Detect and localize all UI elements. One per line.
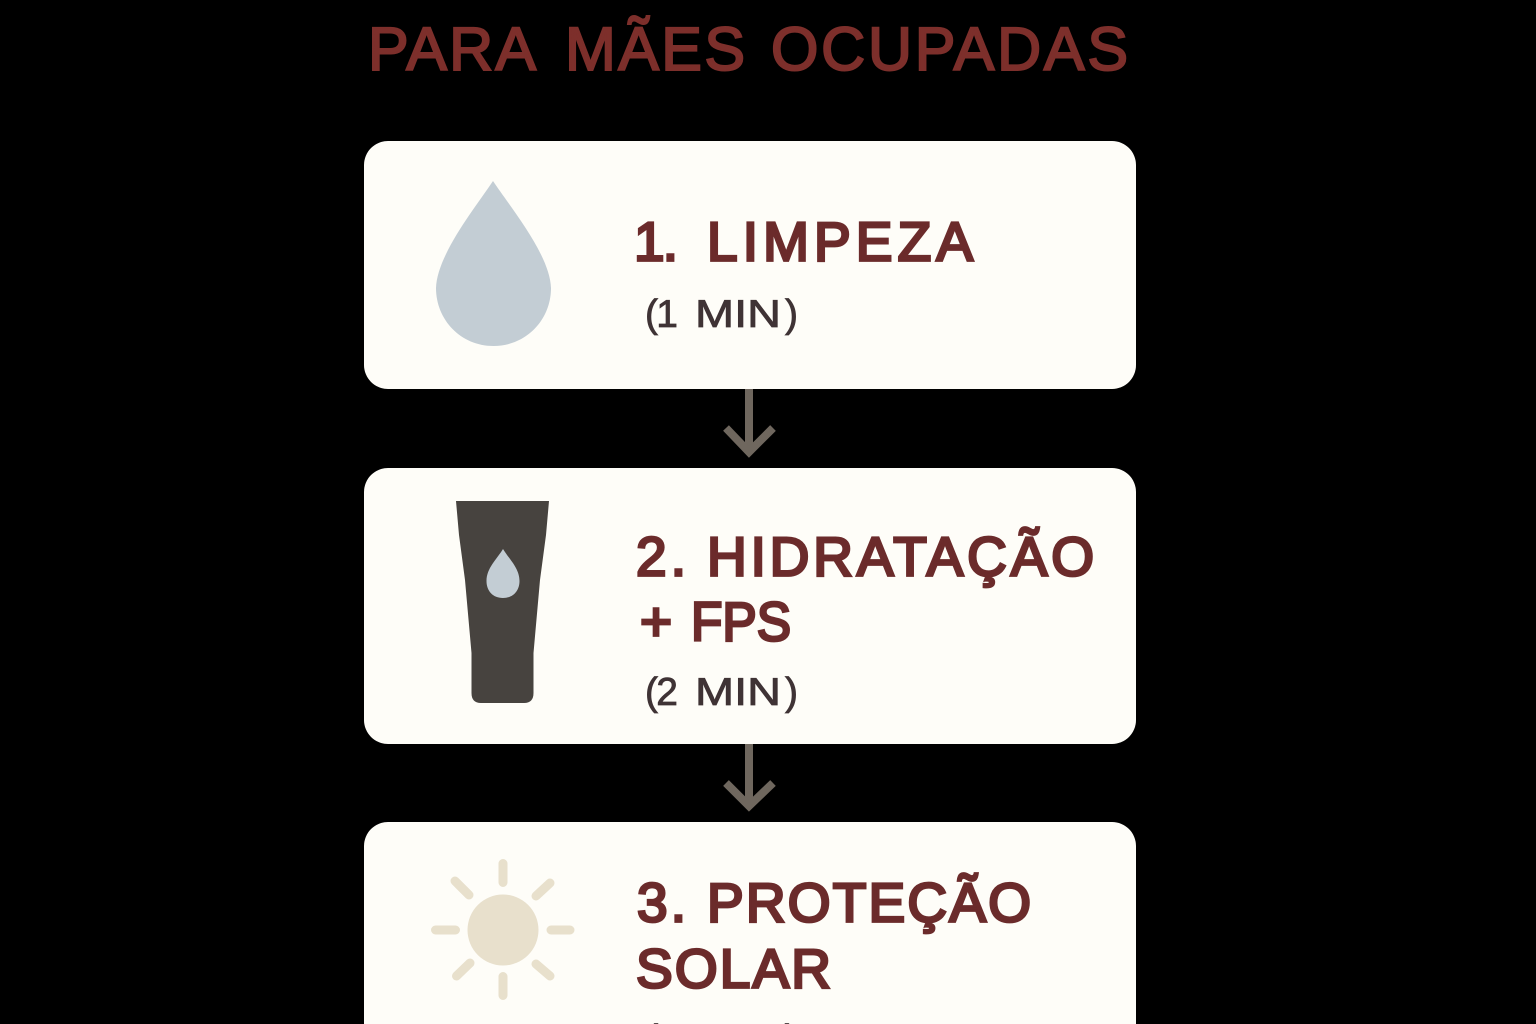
heading: step 1: LIMPEZA [707, 211, 973, 273]
heading: step 2 [636, 526, 1094, 653]
title: MÃES [565, 15, 745, 83]
text: step 1 duration: ) [785, 293, 798, 336]
text: step 2 duration: ) [785, 671, 798, 714]
heading: step 2: FPS [691, 591, 791, 653]
heading: step 2: 2. [636, 526, 686, 588]
text: step 1 duration [645, 293, 798, 336]
title: PARA [368, 15, 536, 83]
heading: step 1: 1. [634, 211, 678, 273]
heading: step 3 [636, 872, 1031, 1000]
heading: step 2: HIDRATAÇÃO [707, 526, 1094, 588]
icon: sun [436, 864, 570, 996]
title [368, 15, 1128, 83]
arrow: step 1 to step 2 [726, 389, 773, 452]
text: step 2 duration [645, 671, 798, 714]
panel: step 1 limpeza [364, 141, 1136, 389]
heading: step 3: 3. [637, 872, 686, 934]
arrow: step 2 to step 3 [726, 744, 773, 806]
text: step 2 duration: (2 [645, 671, 678, 714]
icon: water drop [436, 181, 551, 346]
panel: step 2 hidratacao [364, 468, 1136, 744]
text: step 3 duration [645, 1018, 798, 1024]
text: step 1 duration: (1 [645, 293, 678, 336]
text: step 1 duration: MIN [695, 293, 781, 336]
heading: step 2: + [640, 591, 672, 653]
heading: step 3: PROTEÇÃO [707, 872, 1031, 934]
title: OCUPADAS [771, 15, 1128, 83]
heading: step 3: SOLAR [636, 938, 831, 1000]
icon: tube with drop [456, 501, 549, 703]
panel: step 3 protecao solar [364, 822, 1136, 1024]
text: step 2 duration: MIN [695, 671, 781, 714]
